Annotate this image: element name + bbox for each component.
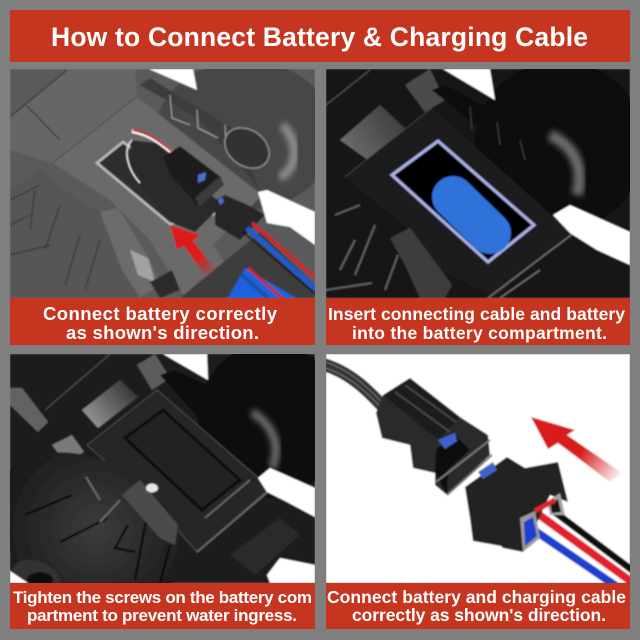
right connector (465, 457, 568, 552)
compartment frame (392, 141, 534, 262)
caption: partment to prevent water ingress. (27, 606, 297, 625)
arrow (531, 417, 622, 482)
screw (146, 484, 158, 492)
panel: tighten the screws (10, 354, 315, 629)
title banner: How to Connect Battery & Charging Cable (51, 22, 588, 52)
blue tab (438, 433, 457, 449)
caption: Connect battery correctly (43, 303, 278, 324)
caption: into the battery compartment. (352, 323, 607, 343)
mudguard bracket (122, 480, 178, 545)
right tyre (198, 354, 315, 498)
caption: as shown's direction. (66, 322, 259, 343)
blue tab (478, 462, 497, 479)
caption: correctly as shown's direction. (352, 605, 606, 625)
illustration: closed compartment cover and tyre (10, 354, 315, 583)
wires (552, 514, 630, 574)
chassis plate (53, 97, 262, 298)
illustration: truck underside with open battery compartment (10, 60, 335, 298)
connector pair (163, 146, 222, 206)
compartment cover (125, 410, 240, 510)
left tyre (10, 170, 150, 298)
blue battery (453, 197, 490, 233)
title banner (10, 10, 630, 62)
caption (326, 583, 630, 629)
chassis plate (87, 390, 270, 552)
illustration: plug and socket on white (322, 354, 640, 590)
caption: Insert connecting cable and battery (328, 304, 625, 324)
illustration: compartment with blue battery (326, 60, 640, 298)
caption: Connect battery and charging cable (327, 587, 626, 607)
panel: insert cable and battery (326, 60, 640, 345)
battery lead wires (132, 131, 172, 152)
caption (10, 298, 315, 345)
left connector (376, 378, 492, 495)
battery body (130, 140, 222, 232)
right tyre (475, 69, 630, 218)
arrow (170, 225, 216, 278)
compartment opening (97, 142, 222, 224)
caption: Tighten the screws on the battery com (13, 588, 312, 607)
panel: connect battery inside compartment (10, 60, 335, 345)
caption (10, 583, 315, 629)
right tyre (159, 69, 315, 210)
black cables (322, 364, 388, 412)
battery pack (228, 268, 296, 298)
wheel hub (12, 560, 60, 583)
caption (326, 298, 630, 345)
tyre (10, 452, 179, 583)
panel: connect battery and charging cable (322, 354, 640, 629)
battery cables (252, 223, 320, 282)
chassis plate (345, 108, 570, 298)
